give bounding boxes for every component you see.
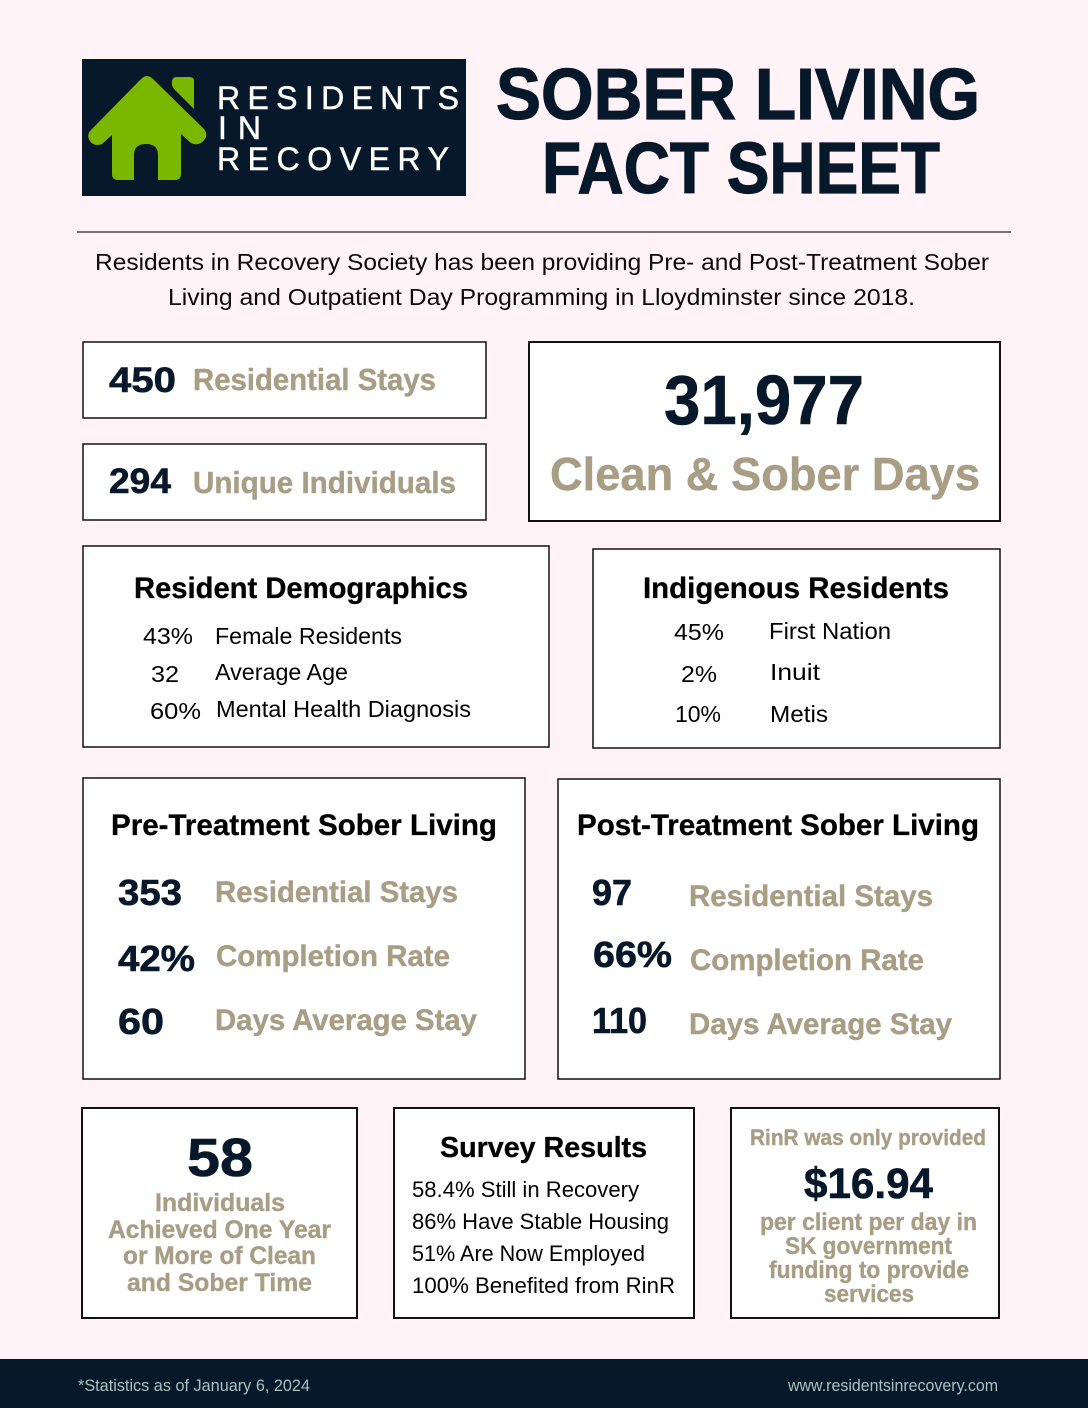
- panel: clean and sober days: [529, 342, 1000, 521]
- panel: post-treatment sober living: Residential Stays: [689, 880, 933, 913]
- panel: indigenous residents: Indigenous Residents: [643, 572, 949, 605]
- panel: post-treatment sober living: 66%: [593, 934, 672, 975]
- title: FACT SHEET: [542, 129, 940, 209]
- panel: pre-treatment sober living: 60: [118, 1001, 164, 1042]
- logo wordmark: [217, 80, 459, 177]
- footer: *Statistics as of January 6, 2024: [78, 1376, 310, 1395]
- panel: one year clean and sober: 58: [187, 1128, 253, 1188]
- panel: one year clean and sober: Individuals: [155, 1189, 285, 1217]
- panel: residential stays: [83, 342, 486, 418]
- panel: government funding: services: [824, 1281, 914, 1308]
- panel: indigenous residents: [593, 549, 1000, 748]
- panel: resident demographics: Female Residents: [215, 623, 402, 649]
- panel: indigenous residents: 45%: [674, 619, 724, 645]
- logo: [82, 59, 466, 196]
- panel: pre-treatment sober living: Pre-Treatment Sober Living: [111, 809, 497, 842]
- panel: indigenous residents: Inuit: [770, 659, 821, 685]
- intro text: [95, 249, 989, 310]
- panel: survey results: 86% Have Stable Housing: [412, 1209, 669, 1234]
- panel: post-treatment sober living: 97: [592, 872, 632, 913]
- intro text: Living and Outpatient Day Programming in Lloydminster since 2018.: [168, 284, 915, 310]
- panel: residential stays: Residential Stays: [193, 362, 436, 397]
- panel: survey results: 100% Benefited from RinR: [412, 1273, 675, 1298]
- logo wordmark: RECOVERY: [217, 141, 449, 177]
- panel: survey results: 58.4% Still in Recovery: [412, 1177, 639, 1202]
- panel: one year clean and sober: [82, 1108, 357, 1318]
- panel: post-treatment sober living: 110: [592, 1000, 647, 1041]
- panel: resident demographics: Mental Health Diagnosis: [216, 696, 471, 722]
- logo wordmark: IN: [218, 110, 261, 146]
- panel: one year clean and sober: Achieved One Year: [108, 1216, 331, 1244]
- panel: post-treatment sober living: [558, 779, 1000, 1079]
- panel: government funding: SK government: [785, 1233, 952, 1260]
- panel: unique individuals: 294: [109, 462, 172, 501]
- panel: government funding: [731, 1108, 999, 1318]
- panel: resident demographics: [83, 546, 549, 747]
- footer: [0, 1359, 1088, 1408]
- panel: residential stays: 450: [109, 361, 176, 400]
- panel: indigenous residents: 2%: [681, 661, 717, 687]
- panel: post-treatment sober living: Completion Rate: [690, 944, 924, 977]
- panel: indigenous residents: First Nation: [769, 618, 891, 644]
- panel: indigenous residents: Metis: [770, 701, 828, 727]
- panel: pre-treatment sober living: Days Average Stay: [215, 1004, 477, 1037]
- icon: green house: [88, 76, 206, 180]
- panel: resident demographics: Average Age: [215, 659, 348, 685]
- panel: one year clean and sober: and Sober Time: [127, 1269, 312, 1297]
- panel: survey results: Survey Results: [440, 1132, 647, 1164]
- panel: resident demographics: Resident Demographics: [134, 572, 468, 605]
- panel: government funding: RinR was only provided: [750, 1125, 986, 1150]
- panel: government funding: per client per day in: [760, 1209, 977, 1236]
- panel: pre-treatment sober living: Residential Stays: [215, 876, 458, 909]
- panel: survey results: [394, 1108, 694, 1318]
- panel: resident demographics: 43%: [143, 623, 193, 649]
- panel: pre-treatment sober living: [83, 778, 525, 1079]
- panel: government funding: $16.94: [804, 1160, 933, 1208]
- panel: clean and sober days: Clean & Sober Days: [550, 448, 980, 500]
- intro text: Residents in Recovery Society has been providing Pre- and Post-Treatment Sober: [95, 249, 989, 275]
- panel: unique individuals: Unique Individuals: [193, 465, 456, 500]
- title: [496, 55, 980, 209]
- panel: survey results: 51% Are Now Employed: [412, 1241, 645, 1266]
- panel: government funding: funding to provide: [769, 1257, 969, 1284]
- panel: post-treatment sober living: Days Average Stay: [689, 1008, 952, 1041]
- panel: unique individuals: [83, 444, 486, 520]
- logo wordmark: RESIDENTS: [217, 80, 459, 116]
- title: SOBER LIVING: [496, 55, 980, 135]
- panel: one year clean and sober: or More of Clean: [123, 1242, 316, 1270]
- panel: resident demographics: 60%: [150, 698, 201, 724]
- panel: pre-treatment sober living: 353: [118, 872, 182, 913]
- panel: resident demographics: 32: [151, 661, 179, 687]
- panel: pre-treatment sober living: Completion Rate: [216, 940, 450, 973]
- panel: indigenous residents: 10%: [675, 701, 721, 727]
- panel: post-treatment sober living: Post-Treatment Sober Living: [577, 809, 979, 842]
- panel: pre-treatment sober living: 42%: [118, 938, 195, 979]
- footer: www.residentsinrecovery.com: [787, 1376, 998, 1395]
- panel: clean and sober days: 31,977: [664, 361, 864, 439]
